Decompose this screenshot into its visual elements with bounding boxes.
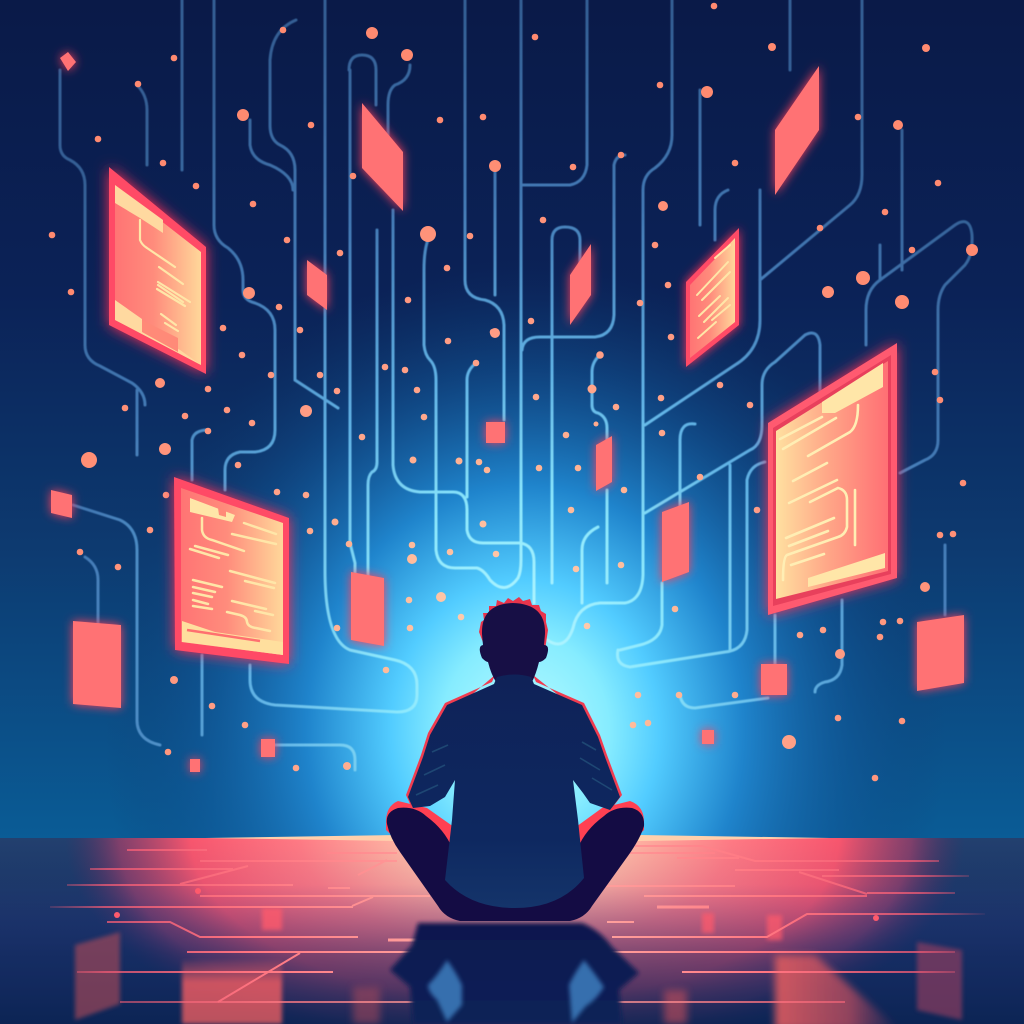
jacket fold highlights <box>416 742 612 795</box>
panel: upper right document <box>686 228 739 367</box>
legs <box>387 808 644 921</box>
jacket rim light <box>406 675 622 808</box>
horizon glow <box>205 835 830 841</box>
panel: lower left document <box>174 477 289 664</box>
panel: large right document <box>768 343 897 615</box>
reflective floor <box>0 835 1024 1024</box>
panel reflections on the floor <box>75 908 962 1024</box>
panel: upper left document <box>109 167 206 374</box>
reflected particles <box>114 888 879 921</box>
floor circuit traces <box>50 846 985 1002</box>
small floating document shards <box>51 52 964 772</box>
figure reflection <box>390 923 639 1024</box>
jacket and arms <box>408 674 620 908</box>
floating particles <box>49 3 978 781</box>
head and hair <box>479 597 548 682</box>
seated figure seen from behind <box>386 597 644 921</box>
red leg rim light <box>386 801 644 880</box>
circuit lines rising from the figure <box>60 0 972 770</box>
